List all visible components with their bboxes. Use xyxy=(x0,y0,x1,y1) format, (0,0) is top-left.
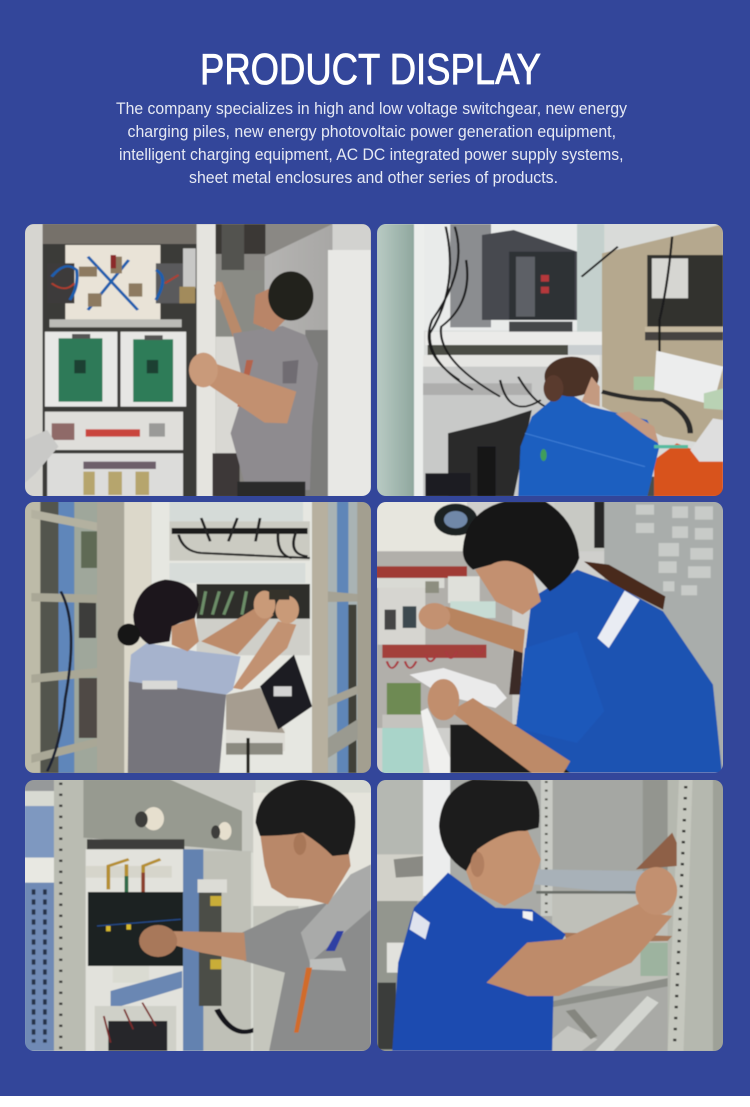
intro text block: The company specializes in high and low voltage switchgear, new energy xyxy=(116,100,628,118)
photo: man in blue uniform fixing metal rail xyxy=(376,776,725,1053)
intro text block: intelligent charging equipment, AC DC integrated power supply systems, xyxy=(119,146,624,164)
photo: technician in blue wiring a power cabinet xyxy=(376,220,725,500)
intro text block: charging piles, new energy photovoltaic power generation equipment, xyxy=(128,123,616,141)
photo: woman in grey shirt working on a rack xyxy=(20,498,373,775)
intro text block: sheet metal enclosures and other series of products. xyxy=(189,169,558,187)
photo: man in grey uniform adjusting breakers xyxy=(20,776,373,1053)
photo: technician in grey opening switchgear cabinet xyxy=(20,220,382,500)
title: PRODUCT DISPLAY xyxy=(200,45,541,94)
photo: woman in blue shirt testing panel xyxy=(376,498,725,775)
intro text block xyxy=(116,100,628,187)
